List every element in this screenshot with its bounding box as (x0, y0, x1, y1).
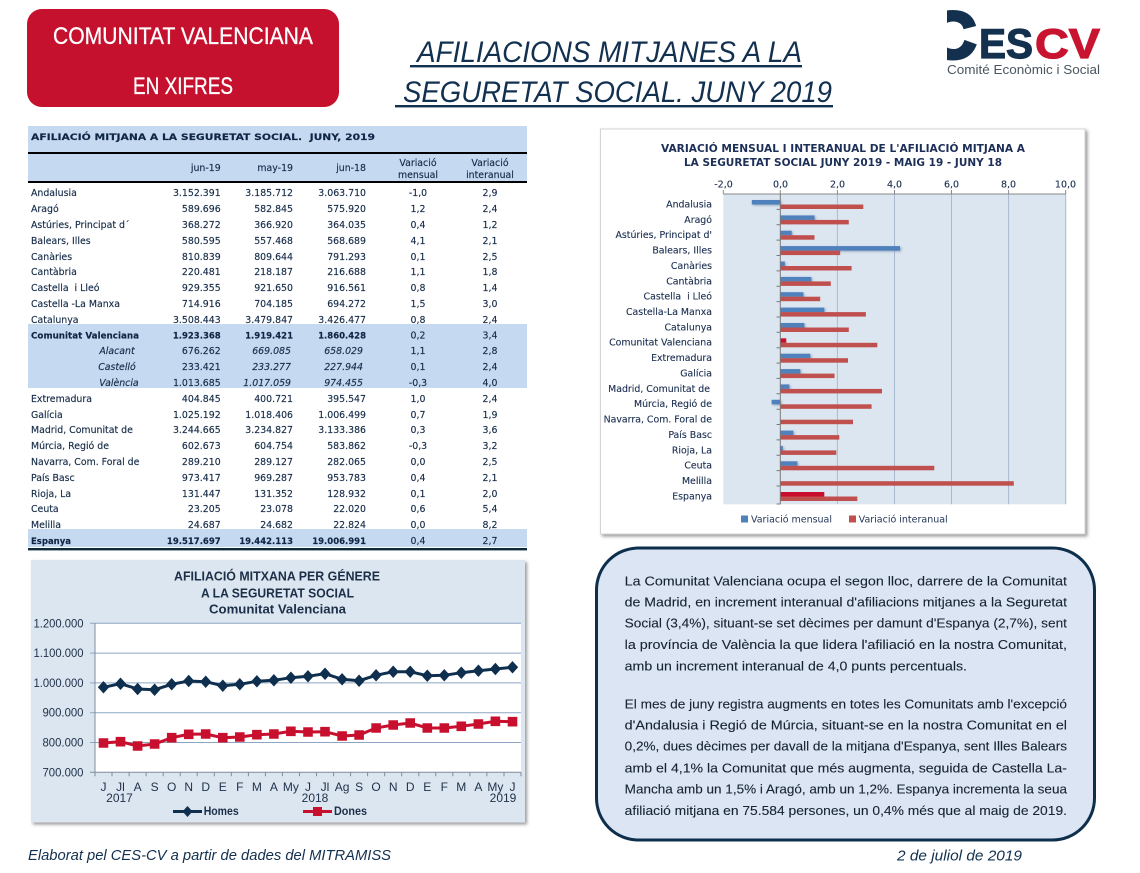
bar chart title: LA SEGURETAT SOCIAL JUNY 2019 - MAIG 19 - JUNY 18 (684, 157, 1002, 169)
row: Alacant: 676.262 (182, 346, 221, 357)
row: Cantàbria: 220.481 (182, 267, 221, 278)
row: Navarra: 2,5 (483, 457, 497, 468)
row: València: 974.455 (324, 378, 363, 389)
row: Extremadura: 395.547 (327, 394, 366, 405)
row: València: -0,3 (409, 378, 427, 389)
row: Castella i Lleó: 929.355 (182, 283, 221, 294)
row: Castelló: 227.944 (324, 362, 363, 373)
row: Catalunya: 2,4 (483, 315, 497, 326)
category labels: Rioja, La (672, 445, 712, 456)
paragraph 2: afiliació mitjana en 75.584 persones, un 0,4% més que al maig de 2019. (625, 803, 1067, 818)
paragraph 2: amb el 4,1% la Comunitat que més augmenta, seguida de Castella La- (625, 760, 1067, 775)
row: Aragó: 2,4 (483, 204, 497, 215)
table header: interanual (466, 170, 514, 181)
row: Alacant: 658.029 (324, 346, 363, 357)
row: Castella i Lleó: 1,4 (483, 283, 497, 294)
row: Balears: 568.689 (327, 236, 366, 247)
row: Castella-La Manxa: 1,5 (411, 299, 425, 310)
row: Ceuta: 23.078 (260, 504, 293, 515)
row: Rioja: Rioja, La (31, 489, 71, 500)
row: Rioja (31, 489, 497, 500)
row: València: 4,0 (483, 378, 497, 389)
row: Comunitat Valenciana: 1.923.368 (173, 332, 221, 342)
row: Múrcia: 3,2 (483, 441, 497, 452)
row: Rioja: 131.352 (254, 489, 293, 500)
row: Galícia (31, 410, 497, 421)
row: Ceuta: 22.020 (333, 504, 366, 515)
row: Madrid: Madrid, Comunitat de (31, 425, 133, 436)
row: Ceuta: Ceuta (31, 504, 59, 515)
row: Comunitat Valenciana (31, 330, 497, 342)
x axis months and years: N (389, 780, 398, 794)
row: Astúries: 1,2 (483, 220, 497, 231)
y axis labels (34, 616, 84, 779)
category labels: Canàries (671, 261, 712, 272)
row: Castella i Lleó: Castella i Lleó (31, 283, 100, 294)
row: Ceuta: 23.205 (188, 504, 221, 515)
row: Castelló: Castelló (98, 362, 136, 373)
row: València: València (99, 378, 139, 389)
row: Castella i Lleó: 921.650 (254, 283, 293, 294)
row: Navarra: 289.127 (254, 457, 293, 468)
bar chart title (661, 142, 1026, 169)
x axis months and years: 2017 (106, 791, 133, 805)
x axis months and years: Jl (116, 780, 125, 794)
category labels: Castella i Lleó (644, 292, 712, 303)
top axis: 6,0 (944, 180, 959, 190)
x axis months and years: A (474, 780, 482, 794)
row: País Basc: 953.783 (327, 473, 366, 484)
logo: CES CV: CV (1035, 20, 1100, 67)
line chart legend: Homes (204, 806, 239, 818)
badge: Comunitat Valenciana en xifres: EN XIFRES (133, 73, 233, 100)
paragraph 1: amb un increment interanual de 4,0 punts percentuals. (625, 659, 967, 674)
row: Cantàbria: 218.187 (254, 267, 293, 278)
logo: CES CV: Comité Econòmic i Social (947, 62, 1100, 77)
x axis months and years: N (184, 780, 193, 794)
x axis months and years: J (305, 780, 311, 794)
row: Astúries (31, 220, 497, 231)
row: Astúries: 0,4 (411, 220, 425, 231)
row: Espanya: 19.442.113 (239, 537, 293, 547)
row: Espanya: 2,7 (483, 536, 497, 547)
row: Canàries: 791.293 (327, 252, 366, 263)
logo: CES CV: ES (979, 20, 1033, 67)
row: Balears: 4,1 (411, 236, 425, 247)
row: Madrid: 3.244.665 (173, 425, 221, 436)
x axis months and years: E (423, 780, 431, 794)
bars: highlighted Comunitat Valenciana and Espanya (780, 338, 824, 496)
category labels: Galícia (680, 368, 712, 380)
table header: Variació (471, 158, 509, 169)
top axis: 8,0 (1001, 180, 1016, 190)
row: Castella-La Manxa: Castella -La Manxa (31, 299, 120, 310)
bar chart legend (741, 514, 948, 526)
paragraph 2: El mes de juny registra augments en totes les Comunitats amb l'excepció (625, 696, 1067, 711)
logo: CES CV: C (927, 0, 976, 72)
y axis labels: 900.000 (42, 706, 84, 720)
row: Catalunya (31, 315, 497, 326)
x axis months and years: M (252, 780, 262, 794)
row: Andalusia: Andalusia (31, 188, 77, 199)
row: Melilla: 22.824 (333, 520, 366, 531)
row: Castelló: 2,4 (483, 362, 497, 373)
row: Balears: Balears, Illes (31, 236, 91, 247)
top axis: 4,0 (887, 180, 902, 190)
row: Madrid (31, 425, 497, 436)
row: Melilla: 24.687 (188, 520, 221, 531)
y axis labels: 700.000 (42, 765, 84, 779)
row: Canàries: Canàries (31, 252, 72, 263)
x axis months and years: F (236, 780, 243, 794)
row: Aragó: Aragó (31, 204, 59, 215)
row: València: 1.013.685 (173, 378, 221, 389)
row: Canàries: 810.839 (182, 252, 221, 263)
row: Castelló: 233.421 (182, 362, 221, 373)
row: Melilla (31, 520, 497, 531)
row: Galícia: 1.025.192 (173, 410, 221, 421)
row: Aragó: 582.845 (254, 204, 293, 215)
table header (190, 158, 514, 181)
row: Madrid: 3,6 (483, 425, 497, 436)
category labels: Extremadura (651, 353, 712, 364)
paragraph 2: d'Andalusia i Regió de Múrcia, situant-se en la nostra Comunitat en el (625, 717, 1067, 732)
paragraph 2: 0,2%, dues dècimes per davall de la mitjana d'Espanya, sent Illes Balears (625, 739, 1068, 754)
category labels: Madrid, Comunitat de (608, 384, 710, 395)
row: Extremadura: 2,4 (483, 394, 497, 405)
row: Andalusia: 2,9 (483, 188, 497, 199)
row: Rioja: 128.932 (327, 489, 366, 500)
x axis months and years: J (510, 780, 516, 794)
footer: source: Elaborat pel CES-CV a partir de dades del MITRAMISS (28, 847, 391, 864)
row: Andalusia: 3.063.710 (318, 188, 366, 199)
y axis labels: 1.200.000 (34, 616, 84, 630)
row: Galícia: 1.006.499 (318, 410, 366, 421)
row: Aragó: 575.920 (327, 204, 366, 215)
row: Galícia: 1,9 (483, 410, 497, 421)
row: Castelló: 0,1 (411, 362, 425, 373)
row: Castelló (98, 362, 497, 373)
line chart legend: Dones (334, 806, 367, 818)
title: SEGURETAT SOCIAL. JUNY 2019 (403, 76, 832, 109)
paragraph 1: Social (3,4%), situant-se set dècimes per damunt d'Espanya (2,7%), sent (625, 616, 1067, 631)
x axis months and years: 2018 (302, 791, 329, 805)
x axis months and years (100, 780, 517, 805)
row: Galícia: 0,7 (411, 410, 425, 421)
panel: line chart by gender (31, 560, 525, 822)
bars: year-on-year variation (780, 204, 1014, 501)
row: Melilla: 24.682 (260, 520, 293, 531)
series: Dones (99, 717, 517, 750)
row: Astúries: Astúries, Principat d´ (31, 220, 130, 231)
row: Aragó (31, 204, 497, 215)
badge: Comunitat Valenciana en xifres: COMUNITAT VALENCIANA (53, 23, 313, 50)
row: Catalunya: 3.508.443 (173, 315, 221, 326)
row: País Basc: 2,1 (483, 473, 497, 484)
row: Extremadura: 400.721 (254, 394, 293, 405)
y axis labels: 1.000.000 (34, 676, 84, 690)
row: Andalusia: 3.185.712 (245, 188, 293, 199)
table header: may-19 (257, 163, 293, 174)
row: Comunitat Valenciana: 1.919.421 (245, 332, 293, 342)
row: Alacant (98, 346, 497, 357)
category labels: Castella-La Manxa (626, 307, 712, 318)
row: Ceuta: 0,6 (411, 504, 425, 515)
row: Madrid: 3.133.386 (318, 425, 366, 436)
row: Balears: 2,1 (483, 236, 497, 247)
row: Múrcia: 602.673 (182, 441, 221, 452)
table header: jun-19 (190, 163, 221, 174)
row: Canàries: 2,5 (483, 252, 497, 263)
x axis months and years: A (270, 780, 278, 794)
category labels: Cantàbria (666, 276, 712, 287)
row: Extremadura (31, 394, 497, 405)
row: Balears: 580.595 (182, 236, 221, 247)
row: Comunitat Valenciana: 1.860.428 (318, 332, 366, 342)
row: País Basc (31, 473, 497, 484)
row: Astúries: 368.272 (182, 220, 221, 231)
top axis: 2,0 (830, 180, 845, 190)
row: Astúries: 364.035 (327, 220, 366, 231)
row: Balears (31, 236, 497, 247)
row: Castelló: 233.277 (252, 362, 291, 373)
row: Canàries (31, 252, 497, 263)
category labels: Catalunya (664, 322, 712, 333)
paragraph 1: La Comunitat Valenciana ocupa el segon lloc, darrere de la Comunitat (625, 574, 1067, 589)
row: Ceuta: 5,4 (483, 504, 497, 515)
row: Castella i Lleó (31, 283, 497, 294)
row: Ceuta (31, 504, 497, 515)
row: Navarra: 0,0 (411, 457, 425, 468)
row: Madrid: 3.234.827 (245, 425, 293, 436)
category labels: Comunitat Valenciana (609, 338, 712, 349)
title (395, 36, 833, 109)
x axis months and years: S (151, 780, 159, 794)
panel: data table (28, 126, 527, 550)
row: Comunitat Valenciana: 3,4 (483, 330, 497, 342)
row: Múrcia: 604.754 (254, 441, 293, 452)
row: Cantàbria (31, 267, 497, 278)
row: Múrcia (31, 441, 497, 452)
row: Balears: 557.468 (254, 236, 293, 247)
x axis months and years: E (219, 780, 227, 794)
category labels: Navarra, Com. Foral de (604, 415, 712, 426)
row: Rioja: 2,0 (483, 489, 497, 500)
x axis months and years: 2019 (490, 791, 517, 805)
row: Navarra: 289.210 (182, 457, 221, 468)
row: Catalunya: 3.479.847 (245, 315, 293, 326)
row: País Basc: 973.417 (182, 473, 221, 484)
line chart title: Comunitat Valenciana (209, 603, 347, 617)
row: Múrcia: 583.862 (327, 441, 366, 452)
category labels: Aragó (684, 215, 712, 226)
category labels: Melilla (682, 476, 712, 487)
row: Cantàbria: 1,8 (483, 267, 497, 278)
line chart legend (173, 806, 367, 818)
paragraph 1 (625, 574, 1067, 674)
line chart title: AFILIACIÓ MITXANA PER GÉNERE (174, 569, 380, 584)
x axis months and years: Ag (335, 780, 349, 794)
row: Múrcia: Múrcia, Regió de (31, 441, 109, 452)
row: Navarra: 282.065 (327, 457, 366, 468)
top axis: 0,0 (773, 180, 788, 190)
row: Castella-La Manxa: 714.916 (182, 299, 221, 310)
category labels: País Basc (668, 430, 712, 441)
row: Alacant: 2,8 (483, 346, 497, 357)
top axis: -2,0 (714, 180, 733, 190)
row: Cantàbria: 216.688 (327, 267, 366, 278)
category labels: Ceuta (684, 461, 712, 472)
row: Alacant: 669.085 (252, 346, 291, 357)
series: Homes (98, 662, 518, 695)
row: País Basc: País Basc (31, 473, 75, 484)
panel: commentary text box (596, 548, 1094, 840)
row: Múrcia: -0,3 (409, 441, 427, 452)
row: Castella-La Manxa (31, 299, 497, 310)
row: Aragó: 589.696 (182, 204, 221, 215)
bar chart legend: Variació mensual (751, 514, 832, 526)
row: Extremadura: Extremadura (31, 394, 92, 405)
title: AFILIACIONS MITJANES A LA (415, 36, 802, 69)
row: Canàries: 809.644 (254, 252, 293, 263)
row: Castella-La Manxa: 3,0 (483, 299, 497, 310)
x axis months and years: My (283, 780, 299, 794)
row: País Basc: 0,4 (411, 473, 425, 484)
row: Melilla: 0,0 (411, 520, 425, 531)
x axis months and years: F (441, 780, 448, 794)
paragraph 1: de Madrid, en increment interanual d'afiliacions mitjanes a la Seguretat (625, 595, 1067, 610)
row: País Basc: 969.287 (254, 473, 293, 484)
x axis months and years: O (167, 780, 176, 794)
row: Extremadura: 1,0 (411, 394, 425, 405)
paragraph 2 (625, 696, 1068, 818)
row: Madrid: 0,3 (411, 425, 425, 436)
row: Castella-La Manxa: 694.272 (327, 299, 366, 310)
x axis months and years: A (134, 780, 142, 794)
row: Andalusia (31, 188, 497, 199)
row: Espanya: 19.517.697 (167, 537, 221, 547)
row: Catalunya: 3.426.477 (318, 315, 366, 326)
bar chart title: VARIACIÓ MENSUAL I INTERANUAL DE L'AFILIACIÓ MITJANA A (661, 142, 1026, 155)
row: Espanya (31, 536, 497, 547)
row: Catalunya: Catalunya (31, 315, 78, 326)
category labels: Balears, Illes (652, 246, 712, 256)
row: Melilla: Melilla (31, 520, 61, 531)
row: Galícia: Galícia (31, 410, 63, 421)
footer: date: 2 de juliol de 2019 (896, 848, 1023, 864)
row: Espanya: Espanya (31, 537, 71, 547)
bar chart legend: Variació interanual (859, 514, 948, 526)
row: Rioja: 131.447 (182, 489, 221, 500)
y axis labels: 1.100.000 (34, 646, 84, 660)
x axis months and years: M (456, 780, 466, 794)
row: Rioja: 0,1 (411, 489, 425, 500)
row: Castella i Lleó: 916.561 (327, 283, 366, 294)
row: Espanya: 19.006.991 (312, 537, 366, 547)
top axis (714, 180, 1076, 194)
row: Castella-La Manxa: 704.185 (254, 299, 293, 310)
row: Alacant: Alacant (98, 346, 135, 357)
x axis months and years: S (355, 780, 363, 794)
row: Comunitat Valenciana: Comunitat Valenciana (31, 332, 139, 342)
panel: bar chart monthly and year-on-year variation (600, 129, 1085, 534)
row: Astúries: 366.920 (254, 220, 293, 231)
row: Espanya: 0,4 (411, 536, 425, 547)
row: Alacant: 1,1 (411, 346, 425, 357)
row: Canàries: 0,1 (411, 252, 425, 263)
x axis months and years: Jl (321, 780, 329, 794)
line chart title: A LA SEGURETAT SOCIAL (201, 587, 354, 601)
x axis months and years: O (371, 780, 381, 794)
top axis: 10,0 (1055, 180, 1076, 190)
category labels: Andalusia (666, 199, 712, 210)
table title: AFILIACIÓ MITJANA A LA SEGURETAT SOCIAL. JUNY, 2019 (31, 131, 375, 143)
x axis months and years: J (100, 780, 106, 794)
row: Comunitat Valenciana: 0,2 (411, 330, 425, 342)
row: Navarra: Navarra, Com. Foral de (31, 457, 140, 468)
x axis months and years: D (201, 780, 210, 794)
category labels: Múrcia, Regió de (634, 399, 712, 410)
row: Aragó: 1,2 (411, 204, 425, 215)
logo: CES CV (947, 10, 1101, 74)
category labels: Astúries, Principat d' (615, 230, 712, 241)
row: Navarra (31, 457, 497, 468)
paragraph 2: Mancha amb un 1,5% i Aragó, amb un 1,2%. Espanya incrementa la seua (625, 782, 1068, 796)
row: Melilla: 8,2 (483, 520, 497, 531)
row: València (99, 378, 497, 389)
row: Galícia: 1.018.406 (245, 410, 293, 421)
table header: mensual (398, 170, 438, 181)
row: Cantàbria: 1,1 (411, 267, 425, 278)
x axis months and years: My (487, 780, 503, 794)
paragraph 1: la província de València la que lidera l'afiliació en la nostra Comunitat, (625, 637, 1067, 652)
table header: jun-18 (335, 163, 366, 174)
line chart title (174, 569, 380, 617)
row: València: 1.017.059 (243, 378, 291, 389)
row: Catalunya: 0,8 (411, 315, 425, 326)
badge: Comunitat Valenciana en xifres (27, 9, 339, 107)
table header: Variació (399, 158, 437, 169)
category labels: Espanya (672, 491, 712, 502)
row: Castella i Lleó: 0,8 (411, 283, 425, 294)
row: Andalusia: -1,0 (409, 188, 427, 199)
x axis months and years: D (406, 780, 415, 794)
row: Cantàbria: Cantàbria (31, 267, 77, 278)
row: Andalusia: 3.152.391 (173, 188, 221, 199)
y axis labels: 800.000 (42, 736, 84, 750)
category labels (604, 199, 712, 502)
bars: monthly variation (752, 200, 900, 466)
row: Extremadura: 404.845 (182, 394, 221, 405)
